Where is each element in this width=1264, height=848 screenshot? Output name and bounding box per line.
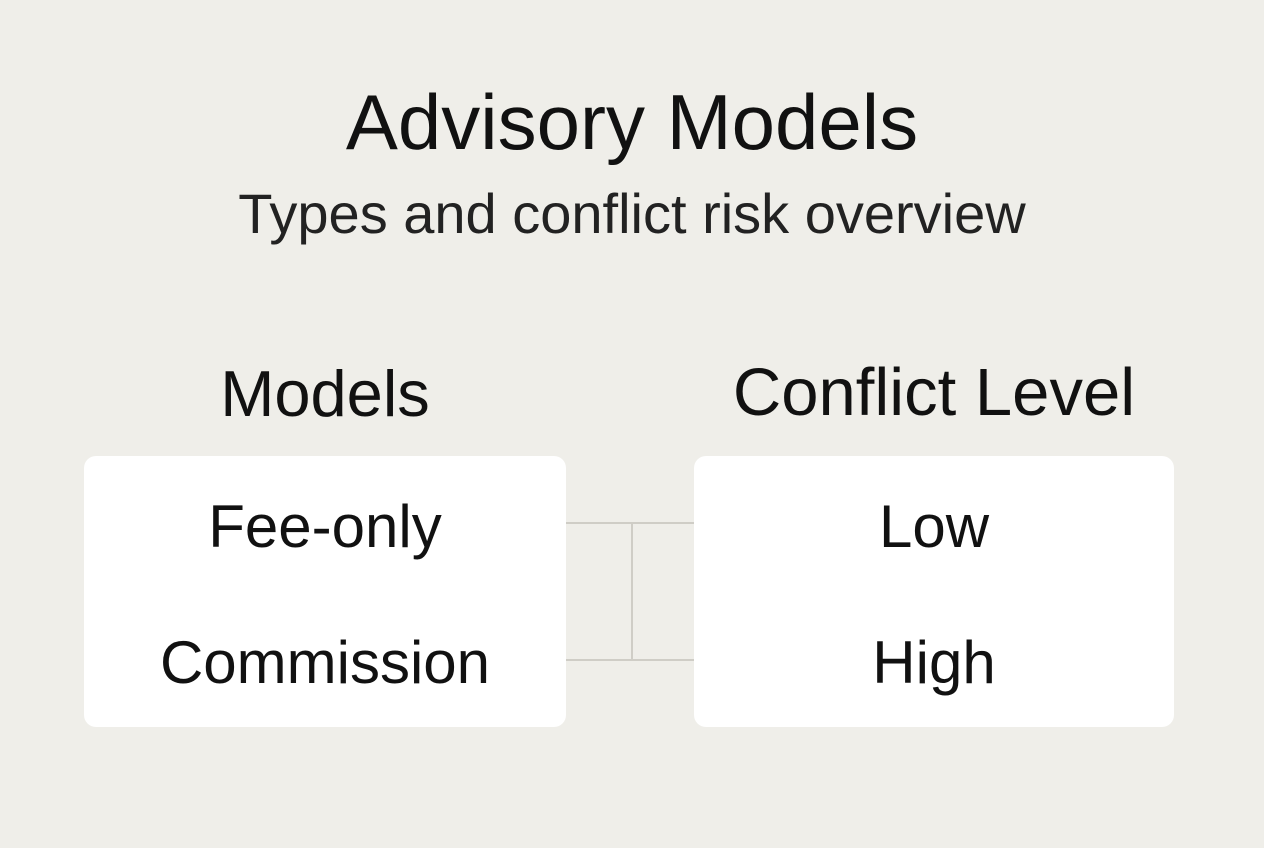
connector lines [566, 522, 694, 661]
heading: conflict level: Conflict Level [733, 355, 1135, 430]
panel: conflict level [694, 456, 1174, 727]
item: high: High [872, 629, 996, 696]
title: Advisory Models [346, 78, 918, 166]
subtitle: Types and conflict risk overview [238, 182, 1026, 245]
item: fee-only: Fee-only [208, 493, 442, 560]
item: commission: Commission [160, 629, 490, 696]
item: low: Low [879, 493, 989, 560]
panel: models [84, 456, 566, 727]
heading: models: Models [220, 357, 430, 430]
